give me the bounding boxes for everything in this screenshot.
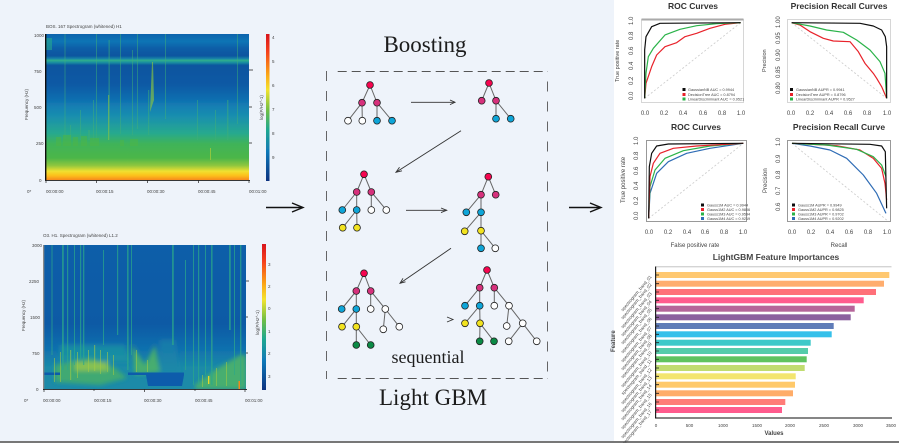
spectrogram 2 tick labels: 00:00:00 [43,398,61,403]
spectrogram 1 heatmap [46,34,249,180]
feature names: spectrogram_band_12 [620,367,653,405]
spectrogram 2 tick labels: 1500 [30,315,41,320]
spectrogram 2 title: O3. H1. Spectrogram (whitened) L1.2 [43,233,118,238]
spectrogram 2 heatmap [44,245,246,389]
spectrogram 1 colorbar: log(P/Hz^-1) [259,95,264,120]
ROC bottom axis labels: 0.4 [683,230,692,236]
PR top legend: LinearDiscriminant AUPR = 0.9527 [796,98,855,102]
ROC top axis labels: 1.0 [629,16,635,25]
feature names: spectrogram_band_11 [620,358,653,396]
chart: ROC curves top [615,1,746,117]
spectrogram 1 tick labels: 250 [36,141,44,146]
PR top axis labels: 0.90 [776,49,782,61]
ROC bottom axis labels: 0.0 [645,230,654,236]
ROC bottom axis labels: 0.8 [720,230,729,236]
spectrogram 2 tick labels: 750 [32,351,40,356]
feature chart tick labels: 0 [655,423,658,428]
white results background [614,0,899,441]
ROC top legend [682,88,744,102]
ROC top axis labels: 0.0 [641,111,650,117]
arrow: spectrograms to boosting [266,203,303,212]
PR bottom axis labels: 0.0 [788,230,797,236]
ROC bottom axis labels: 0.2 [634,196,640,205]
spectrogram 1 tick labels: 00:00:00 [46,189,64,194]
ROC top axis labels: 0.8 [718,111,727,117]
spectrogram 2 tick labels: 00:00:15 [94,398,112,403]
ROC bottom legend: Gauss1M2 AUC = 0.9806 [707,208,750,212]
PR top axis labels: 0.85 [776,66,782,78]
arrow: tree 1 to tree 2 [411,100,455,105]
arrow: tree 5 to tree 6 [447,317,453,322]
chart: precision recall top [762,1,892,117]
ROC top plot [642,18,744,102]
feature names: spectrogram_band_07 [620,325,653,363]
ROC bottom title: ROC Curves [671,122,721,132]
PR bottom axis labels: Recall [831,243,847,249]
PR bottom axis labels: 0.9 [776,154,782,163]
spectrogram 1 tick labels: Frequency (Hz) [24,88,29,120]
bottom rule [0,441,899,443]
ROC bottom legend: Gauss1M3 AUC = 0.9594 [707,212,750,216]
tree 1 [345,82,395,124]
spectrogram 1 colorbar [259,34,275,181]
feature chart axes [655,266,892,418]
ROC bottom axis labels: True positive rate [621,156,627,203]
feature chart tick labels: 3500 [886,423,897,428]
tree 6 [462,267,540,345]
feature chart title: LightGBM Feature Importances [713,252,840,262]
spectrogram 1 tick labels: 0 [39,178,42,183]
spectrogram 1 tick labels: 00:00:15 [96,189,114,194]
feature chart tick labels: 2500 [819,423,830,428]
PR top axis labels: 0.80 [776,82,782,94]
spectrogram 1 tick labels: 00:00:30 [147,189,165,194]
ROC top title: ROC Curves [668,1,718,11]
tree 4 [461,173,499,252]
spectrogram 2 [21,233,271,403]
spectrogram 1 tick labels: 00:01:00 [249,189,267,194]
ROC top legend: LinearDiscriminant AUC = 0.9521 [688,98,744,102]
ROC bottom axis labels: False positive rate [671,243,720,249]
feature names: spectrogram_band_15 [620,392,653,430]
PR bottom axis labels: 0.8 [776,170,782,179]
ROC top axis labels: 0.2 [629,76,635,85]
spectrogram 1 axes [45,34,253,183]
PR top plot [788,20,890,102]
PR top axis labels: 0.8 [863,111,872,117]
PR top axis labels: 0.0 [787,111,796,117]
PR bottom title: Precision Recall Curve [793,122,885,132]
chart: LightGBM feature importances [611,252,897,443]
ROC bottom axis labels: 1.0 [634,136,640,145]
feature names: spectrogram_band_09 [620,341,653,379]
feature names: spectrogram_band_03 [620,291,653,329]
ROC top axis labels: 0.6 [699,111,708,117]
chart: ROC curves bottom [621,122,750,249]
PR bottom legend: Gauss1M2 AUPR = 0.9825 [798,208,844,212]
ROC top axis labels: 1.0 [737,111,746,117]
PR bottom axis labels: 0.8 [864,230,873,236]
PR bottom axis labels: Precision [763,168,769,193]
PR top axis labels: 1.00 [776,16,782,28]
PR top axis labels: 0.6 [844,111,853,117]
ROC bottom axis labels: 0.0 [634,211,640,220]
spectrogram 2 colorbar: log(P/Hz^-1) [255,310,260,335]
feature chart tick labels: 1500 [752,423,763,428]
PR bottom legend: Gauss1M AUPR = 0.9949 [798,204,842,208]
ROC top axis labels: 0.4 [679,111,688,117]
arrow: tree 3 to tree 4 [406,208,447,213]
spectrogram 1 colorbar: 4 [272,35,275,40]
PR top legend: GaussianNB AUPR = 0.9941 [796,88,845,92]
spectrogram 2 colorbar: 2 [268,351,271,356]
spectrogram 1 tick labels: 00:00:45 [198,189,216,194]
spectrogram 1 tick labels: 1000 [34,33,45,38]
spectrogram 1 [24,24,275,194]
spectrogram 2 colorbar: 2 [268,284,271,289]
PR bottom legend [792,204,844,221]
ROC bottom axis labels: 0.4 [634,181,640,190]
PR top axis labels: 0.2 [806,111,815,117]
spectrogram 1 tick labels: 0* [27,189,32,194]
spectrogram 2 colorbar: 1 [268,329,271,334]
feature names: spectrogram_band_05 [620,307,653,345]
ROC top axis labels: 0.2 [660,111,669,117]
spectrogram 2 colorbar: 0 [268,306,271,311]
PR top legend: DecisionTree AUPR = 0.8796 [796,93,846,97]
ROC bottom legend [701,204,750,221]
ROC bottom axis labels: 0.2 [664,230,673,236]
spectrogram 2 tick labels: 0 [36,387,39,392]
spectrogram 2 tick labels: 00:00:45 [195,398,213,403]
feature names [620,274,653,443]
feature names: spectrogram_band_06 [620,316,653,354]
spectrogram 2 tick labels [21,243,263,403]
ROC top axis labels: True positive rate [615,40,621,82]
PR bottom axis labels: 1.0 [883,230,892,236]
spectrogram 2 tick labels: 0* [24,398,29,403]
PR bottom axis labels: 1.0 [776,137,782,146]
PR bottom legend: Gauss1M3 AUPR = 0.9702 [798,212,844,216]
feature chart tick labels [655,423,897,428]
ROC top legend: DecisionTree AUC = 0.8794 [688,93,735,97]
PR bottom axis labels: 0.4 [826,230,835,236]
spectrogram 2 tick labels: 2250 [29,279,40,284]
PR top axis labels: 0.95 [776,32,782,44]
spectrogram 2 tick labels: 00:01:00 [245,398,263,403]
ROC bottom plot [646,140,746,222]
heading: Light GBM: Light GBM [379,385,487,410]
ROC bottom axis labels: 1.0 [739,230,748,236]
dashed boosting frame [326,71,548,379]
feature names: spectrogram_band_08 [620,333,653,371]
ROC bottom axis labels: 0.6 [701,230,710,236]
tree 5 [338,270,403,348]
spectrogram 1 tick labels: 750 [34,69,42,74]
spectrogram 1 colorbar: 6 [272,83,275,88]
spectrogram 1 tick labels: 500 [34,105,42,110]
heading: Boosting: Boosting [383,32,467,57]
feature names: spectrogram_band_13 [620,375,653,413]
PR top axis labels [762,16,892,117]
PR bottom axis labels: 0.2 [807,230,816,236]
PR bottom plot [788,140,890,222]
spectrogram 1 title: BOS. 167 Spectrogram (whitened) H1 [46,24,122,29]
ROC top axis labels: 0.0 [629,91,635,100]
feature chart tick labels: 1000 [718,423,729,428]
ROC bottom axis labels [621,136,748,249]
spectrogram 2 colorbar: 3 [268,262,271,267]
ROC bottom axis labels: 0.8 [634,151,640,160]
tree 2 [478,80,514,122]
spectrogram 2 colorbar: 3 [268,374,271,379]
ROC bottom legend: Gauss1M AUC = 0.9944 [707,204,748,208]
PR bottom axis labels: 0.6 [776,202,782,211]
ROC top axis labels: 0.8 [629,31,635,40]
spectrogram 1 colorbar: 7 [272,107,275,112]
feature names: spectrogram_band_10 [620,350,653,388]
spectrogram 1 colorbar: 9 [272,155,275,160]
PR bottom axis labels: 0.7 [776,186,782,195]
arrow: tree 4 to tree 5 [400,248,451,283]
spectrogram 1 colorbar: 5 [272,59,275,64]
PR bottom axis labels: 0.6 [845,230,854,236]
spectrogram 2 tick labels: 3000 [32,243,43,248]
feature chart y axis title: Feature [611,330,617,352]
spectrogram 2 axes [43,245,249,392]
PR bottom legend: Gauss1M4 AUPR = 0.9202 [798,217,844,221]
feature chart tick labels: 2000 [785,423,796,428]
chart: precision recall bottom [763,122,892,249]
spectrogram 2 tick labels: Frequency (Hz) [21,299,26,331]
PR top title: Precision Recall Curves [791,1,888,11]
spectrogram 2 colorbar [255,244,271,390]
PR top axis labels: 1.0 [883,111,892,117]
feature chart bars [656,272,889,413]
PR bottom axis labels [763,137,892,249]
spectrogram 2 tick labels: 00:00:30 [144,398,162,403]
ROC top legend: GaussianNB AUC = 0.9944 [688,88,734,92]
arrow: boosting to results [569,203,601,212]
ROC bottom legend: Gauss1M4 AUC = 0.9219 [707,217,750,221]
feature chart x axis title: Values [764,431,784,437]
PR top legend [790,88,855,102]
spectrogram 1 colorbar: 8 [272,131,275,136]
arrow: tree 2 to tree 3 [396,131,461,172]
ROC top axis labels [615,16,746,117]
PR top axis labels: Precision [762,49,768,72]
spectrogram 1 tick labels [24,33,267,194]
feature chart tick labels: 3000 [853,423,864,428]
feature chart tick labels: 500 [686,423,694,428]
ROC top axis labels: 0.4 [629,61,635,70]
ROC top axis labels: 0.6 [629,46,635,55]
label: sequential: sequential [392,347,464,367]
PR top axis labels: 0.4 [825,111,834,117]
feature names: spectrogram_band_16 [620,401,653,439]
feature names: spectrogram_band_04 [620,299,653,337]
feature names: spectrogram_band_02 [620,282,653,320]
tree 3 [339,171,390,231]
ROC bottom axis labels: 0.6 [634,166,640,175]
feature names: spectrogram_band_01 [620,274,653,312]
feature names: spectrogram_band_14 [620,383,653,421]
